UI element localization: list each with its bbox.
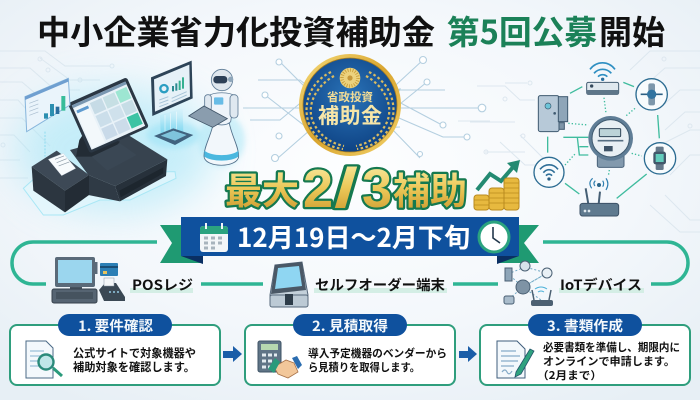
illustration: dashboard tablet and robot [147,61,245,167]
step 2 heading: 2. 見積取得 [312,316,388,336]
label: IoT devices: IoTデバイス [560,275,642,295]
solid links [548,82,659,198]
robot [189,69,245,167]
step 1 heading: 1. 要件確認 [78,316,153,336]
router bottom [580,178,619,216]
icon: calendar [200,223,228,252]
ribbon tails [160,225,539,264]
cash drawer [70,134,167,201]
panel: step 1 [10,314,220,385]
floating chart panel [25,78,70,157]
icon: clock [479,222,509,252]
gateway box [538,96,568,132]
headline: up to 2/3 subsidy: 最大 [225,161,299,215]
chrysanthemum emblem [340,68,360,88]
laurel right [356,72,393,149]
dotted links [565,98,642,176]
step 3 text: オンラインで申請します。 [543,353,675,369]
step 3 text: （2月まで） [537,367,602,383]
wifi router top [587,63,619,94]
badge main text: 補助金 [318,100,382,130]
step 2 text: 導入予定機器のベンダーから [308,345,447,361]
headline: up to 2/3 subsidy: 3 [362,159,392,219]
headline: up to 2/3 subsidy: 補助 [393,161,467,215]
icon: self-order kiosk [270,262,308,307]
badge small text: 省政投資 [327,89,373,105]
title: 中小企業省力化投資補助金 [37,6,435,54]
date range text: 12月19日～2月下旬 [237,218,470,255]
circuit background left [0,51,114,178]
dashboard tablet [151,61,193,116]
title suffix: 開始 [599,6,665,54]
arrow: step 1 to 2 [223,346,242,362]
panel: step 2 [245,314,455,385]
connector curve [12,242,688,284]
monitor stand [76,132,137,171]
monitor [68,77,149,153]
smart watch circle [644,143,676,174]
circuit background right [458,51,700,232]
icon: POS register [52,257,125,303]
subsidy badge [299,54,401,156]
headline: up to 2/3 subsidy: 2 [303,159,333,219]
step 2 heading [293,314,407,336]
arrow: step 2 to 3 [459,346,477,362]
laurel left [307,72,344,149]
icon: document and magnifier [26,341,62,378]
illustration: IoT device network [534,63,676,216]
illustration: POS terminal with receipt printer [15,77,215,215]
icon: coins and rising arrow [474,160,520,210]
floor platform [23,172,176,215]
step 1 text: 補助対象を確認します。 [73,359,195,375]
central circuit lines [243,56,486,162]
date banner [181,217,519,256]
label: POS: POSレジ [132,275,193,295]
smart meter [588,116,633,167]
icon: IoT network [504,261,553,306]
title highlight: round 5: 第5回公募 [447,6,597,54]
valve sensor circle [636,79,667,110]
step 3 heading: 3. 書類作成 [547,316,623,336]
step 3 heading [528,314,642,336]
wifi circle [534,157,564,187]
label: self-order terminal: セルフオーダー端末 [315,274,446,295]
icon: calculator and handshake [258,341,302,378]
step 3 text: 必要書類を準備し、期限内に [543,339,680,355]
panel: step 3 [480,314,690,385]
receipt printer [32,151,89,212]
step 1 text: 公式サイトで対象機器や [73,345,196,361]
icon: document and pen [497,341,534,378]
step 1 heading [58,314,172,336]
hologram and chip [147,108,200,148]
headline: up to 2/3 subsidy [225,156,467,219]
headline: up to 2/3 subsidy: / [334,156,359,219]
step 2 text: ら見積りを取得します。 [308,359,420,375]
